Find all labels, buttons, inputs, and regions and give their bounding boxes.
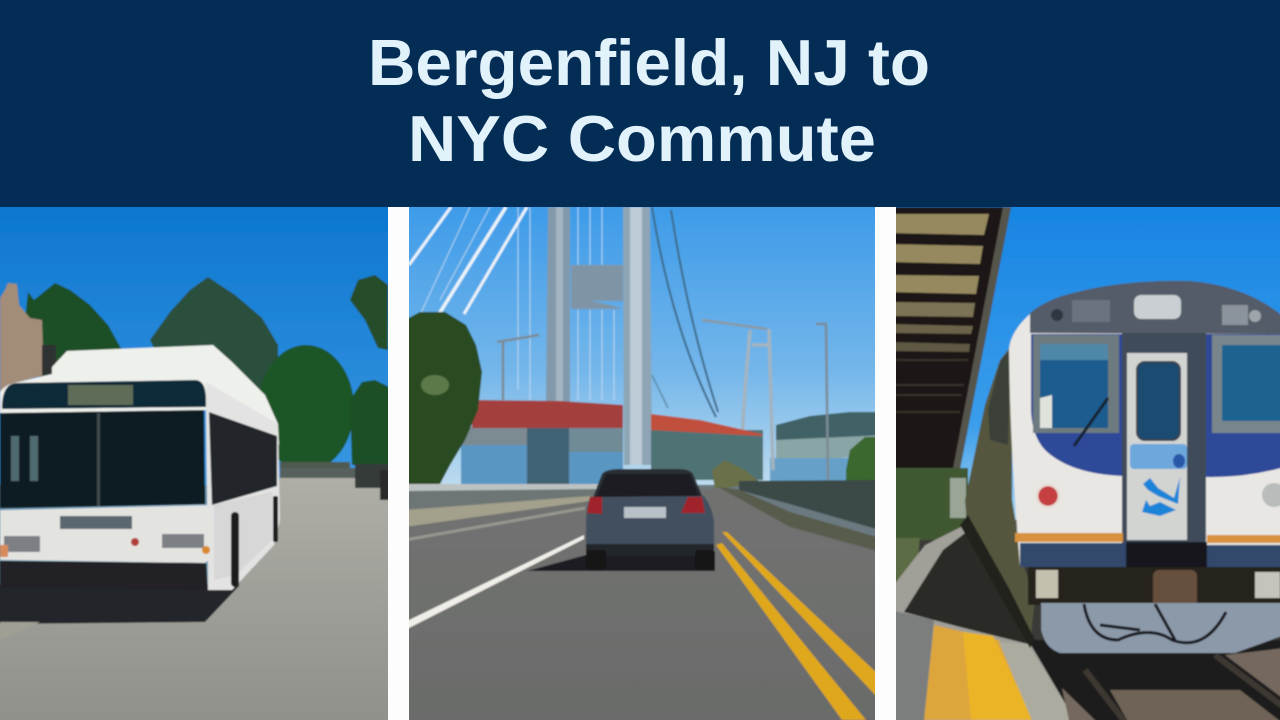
front panel	[0, 505, 212, 563]
road	[0, 478, 395, 720]
bumper	[1041, 603, 1280, 653]
roof	[0, 345, 279, 445]
red lamp	[1037, 485, 1059, 507]
suspension cables	[409, 207, 718, 417]
title	[368, 26, 930, 175]
roof band	[1030, 281, 1280, 334]
side	[206, 382, 280, 590]
windows	[1031, 334, 1280, 477]
coupler area	[1028, 567, 1280, 614]
bus	[0, 345, 280, 590]
right lamp	[1262, 483, 1280, 507]
platform hedge	[896, 467, 970, 583]
panel: car on bridge	[400, 200, 885, 720]
title: Bergenfield, NJ to	[368, 26, 930, 99]
distant hills and water	[770, 412, 885, 482]
door	[1122, 333, 1206, 543]
bumper	[0, 560, 208, 586]
building	[0, 283, 44, 395]
trees	[25, 275, 395, 478]
logo	[1142, 477, 1180, 516]
road shadow	[0, 585, 240, 624]
bushes by the road	[712, 460, 760, 490]
road markings	[405, 532, 880, 720]
train	[960, 281, 1280, 653]
track bed	[1028, 640, 1280, 720]
car	[527, 469, 715, 571]
station canopy	[890, 207, 1011, 474]
bridge tower	[546, 207, 652, 465]
road	[405, 488, 880, 720]
panel dividers	[388, 207, 896, 720]
destination band	[2, 380, 206, 409]
panel: bus on street	[0, 200, 395, 720]
guard rails	[405, 480, 880, 552]
platform shadow	[904, 530, 1030, 644]
tree left	[405, 312, 482, 484]
wheels	[231, 512, 239, 587]
yellow platform edge	[923, 624, 1014, 720]
red bridge deck and building	[461, 400, 763, 484]
far tower and lamp posts	[497, 320, 828, 480]
train body	[1009, 314, 1280, 567]
title: NYC Commute	[408, 102, 876, 175]
header banner	[0, 0, 1280, 207]
parked cars	[280, 464, 390, 500]
panel: train at station	[890, 200, 1280, 720]
orange stripe and lower band	[1015, 533, 1280, 572]
train side	[960, 345, 1035, 648]
windshield	[0, 410, 205, 508]
platform	[890, 525, 1082, 720]
